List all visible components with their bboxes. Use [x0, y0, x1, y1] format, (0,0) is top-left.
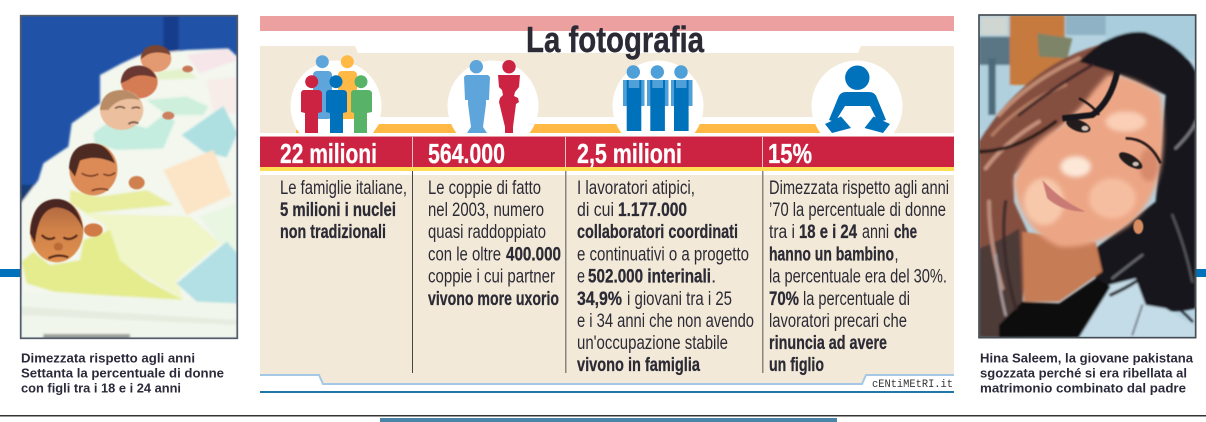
caption: babies: con figli tra i 18 e i 24 anni	[21, 380, 181, 396]
photo: newborn babies	[21, 16, 237, 338]
text column 3: I lavoratori atipici,	[577, 178, 695, 199]
beige body	[260, 175, 954, 383]
icon: couple	[448, 60, 538, 133]
text column 2: vivono more uxorio	[428, 289, 559, 310]
text column 3	[577, 178, 754, 376]
text column 1	[280, 178, 407, 243]
text column 3: collaboratori coordinati	[577, 222, 738, 243]
caption: babies	[21, 350, 224, 396]
text column 4: anni	[862, 222, 889, 243]
number: 22 milioni: 22 milioni	[280, 138, 377, 169]
caption: Hina Saleem: Hina Saleem, la giovane pakistana	[980, 350, 1194, 366]
text column 3: vivono in famiglia	[577, 355, 700, 376]
text column 4	[769, 178, 949, 376]
panel: la fotografia	[260, 16, 954, 393]
text column 3: 1.177.000	[618, 200, 687, 221]
text column 4: che	[894, 222, 917, 243]
text column 3: 34,9%	[577, 289, 622, 310]
text column 4: ,	[894, 244, 898, 266]
red numbers band	[260, 136, 954, 171]
text column 4: ’70 la percentuale di donne	[769, 200, 946, 221]
number: 564.000: 564.000	[428, 138, 505, 169]
beige header background	[260, 46, 954, 133]
photo: Hina Saleem portrait	[979, 15, 1196, 338]
text column 4: tra i	[769, 222, 795, 243]
text column 3: i giovani tra i 25	[627, 289, 732, 310]
eyes, mouth and front locks	[1042, 72, 1161, 234]
title: La fotografia	[526, 19, 705, 60]
caption: babies: Dimezzata rispetto agli anni	[21, 350, 195, 366]
icon: family	[290, 55, 382, 133]
number: 2,5 milioni: 2,5 milioni	[577, 138, 682, 169]
baby heads	[30, 45, 193, 262]
text column 1: non tradizionali	[280, 222, 386, 243]
text column 3: un'occupazione stabile	[577, 333, 728, 354]
text column 4: un figlio	[769, 355, 824, 376]
text column 2: con le oltre	[428, 244, 501, 266]
caption: babies: Settanta la percentuale di donne	[21, 366, 224, 380]
hair: brown left mass	[980, 44, 1115, 302]
caption: Hina Saleem: matrimonio combinato dal padre	[980, 380, 1186, 396]
text column 4: lavoratori precari che	[769, 311, 907, 332]
text column 3: .	[711, 266, 716, 288]
hair strands	[979, 58, 1196, 335]
text column 3: 502.000 interinali	[588, 266, 711, 288]
text column 4: la percentuale era del 30%.	[769, 266, 947, 288]
neck	[1022, 232, 1102, 302]
text column 4: la percentuale di	[803, 289, 910, 310]
text column 4: rinuncia ad avere	[769, 333, 887, 354]
text column 4: 18 e i 24	[799, 222, 857, 243]
shirt	[1072, 278, 1196, 338]
black top	[999, 278, 1111, 338]
icon: baby	[812, 60, 902, 133]
blue rule right	[1195, 269, 1206, 277]
bottom blue bar	[380, 418, 837, 422]
face	[1014, 75, 1163, 247]
text column 2	[428, 178, 561, 310]
text column 2: Le coppie di fatto	[428, 178, 541, 199]
credit: centimetri.it: cENtiMEtRI.it	[872, 379, 953, 391]
caption: Hina Saleem	[980, 350, 1194, 396]
top pink band	[260, 16, 954, 31]
text column 4: hanno un bambino	[769, 244, 894, 266]
text column 2: quasi raddoppiato	[428, 222, 546, 243]
text column 3: di cui	[577, 200, 614, 221]
text column 2: coppie i cui partner	[428, 266, 556, 288]
white and orange stripe	[296, 117, 830, 133]
hair: black crown and right mass	[1079, 32, 1196, 312]
text column 3: e continuativi o a progetto	[577, 244, 749, 266]
number: 15%: 15%	[768, 138, 812, 169]
text column 2: 400.000	[506, 244, 561, 266]
text column 4: 70%	[769, 289, 799, 310]
text column 3: e	[577, 266, 585, 288]
icon: workers	[612, 60, 704, 133]
caption: Hina Saleem: sgozzata perché si era ribellata al	[980, 366, 1187, 380]
bottom rule	[0, 415, 1206, 416]
text column 1: 5 milioni i nuclei	[280, 200, 396, 221]
text column 4: Dimezzata rispetto agli anni	[769, 178, 949, 199]
blue rule left	[0, 269, 22, 277]
text column 2: nel 2003, numero	[428, 200, 544, 221]
text column 1: Le famiglie italiane,	[280, 178, 407, 199]
text column 3: e i 34 anni che non avendo	[577, 311, 754, 332]
